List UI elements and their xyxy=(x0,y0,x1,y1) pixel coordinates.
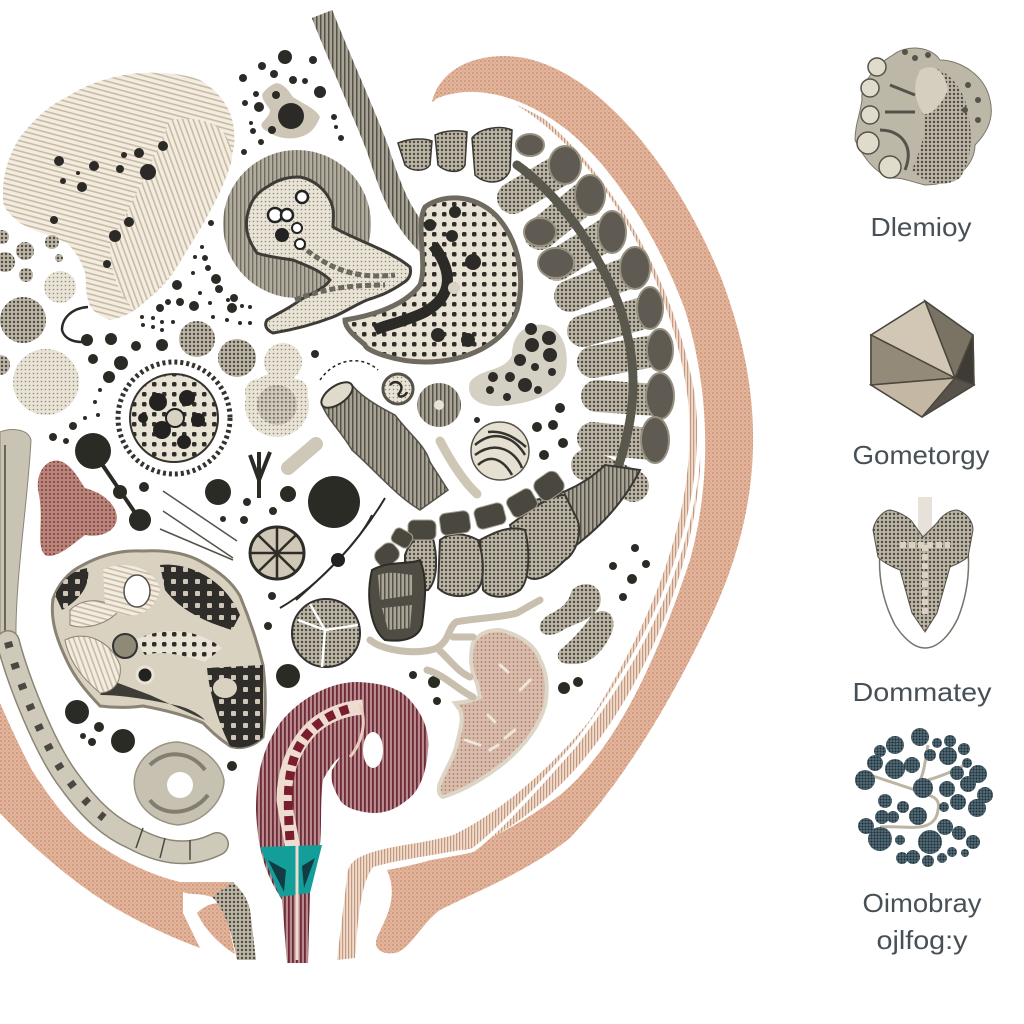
label second line: ojlfog:y xyxy=(876,925,968,955)
right legend item: Dommatey xyxy=(852,497,992,707)
icon: dark berry tree xyxy=(855,728,993,867)
small pale worm xyxy=(440,441,477,494)
label: Dlemioy xyxy=(870,212,972,242)
small capsule xyxy=(288,444,316,468)
black-spotted cell, right xyxy=(469,323,567,406)
icon: folded brain-like mass xyxy=(855,48,991,185)
striped beige lobe, top left xyxy=(3,73,234,320)
intestine cups xyxy=(398,128,512,182)
segmented round cell xyxy=(250,527,304,580)
stomach organ xyxy=(345,198,521,362)
esophagus tube, top xyxy=(322,14,432,248)
right legend item: Oimobray ojlfog:y xyxy=(855,728,993,955)
intestine lower arc xyxy=(405,465,640,597)
pink kidney organ with vessels xyxy=(370,600,547,797)
left spine column xyxy=(0,430,217,860)
intestine vessel xyxy=(517,165,633,500)
radial cell xyxy=(223,150,411,333)
intestine end coil xyxy=(369,560,425,641)
white inner stripe xyxy=(378,94,699,868)
intestine thin dark row xyxy=(371,468,567,570)
stem of lower-left tissue xyxy=(212,882,256,960)
icon: faceted polyhedron xyxy=(871,301,974,417)
porous round cell xyxy=(118,362,230,474)
small round cells, centre xyxy=(383,374,529,480)
scattered ink dots xyxy=(49,220,650,771)
connecting rod between ink dots xyxy=(93,451,140,520)
right legend item: Gometorgy xyxy=(852,301,990,470)
hook line xyxy=(62,307,88,342)
pale ring cell xyxy=(134,742,224,825)
small triangular patch xyxy=(197,903,235,954)
segmented intestine, upper arc xyxy=(398,128,674,500)
dark lobed cell xyxy=(292,599,360,667)
hatched inner band xyxy=(337,96,700,960)
bean-shaped cells xyxy=(540,584,614,664)
intestine ribs xyxy=(513,172,657,486)
ink blob cell, top xyxy=(239,50,344,155)
label: Dommatey xyxy=(852,677,992,707)
outer tan band: right xyxy=(337,56,753,960)
outer tan band: lower left xyxy=(0,703,256,960)
patterned organ, large xyxy=(52,551,265,748)
intestine outer dark lobes xyxy=(516,134,674,463)
stippled cluster, centre xyxy=(245,343,309,437)
icon: horned organ specimen xyxy=(873,497,973,648)
thin needle lines xyxy=(160,361,385,608)
label: Gometorgy xyxy=(852,440,990,470)
small stippled clusters, left xyxy=(0,230,256,415)
label: Oimobray xyxy=(862,888,982,918)
ribbed funnel tube xyxy=(317,377,448,510)
red lobed organ xyxy=(38,461,117,556)
right legend item: Dlemioy xyxy=(855,48,991,242)
red spiral organ xyxy=(256,682,428,963)
